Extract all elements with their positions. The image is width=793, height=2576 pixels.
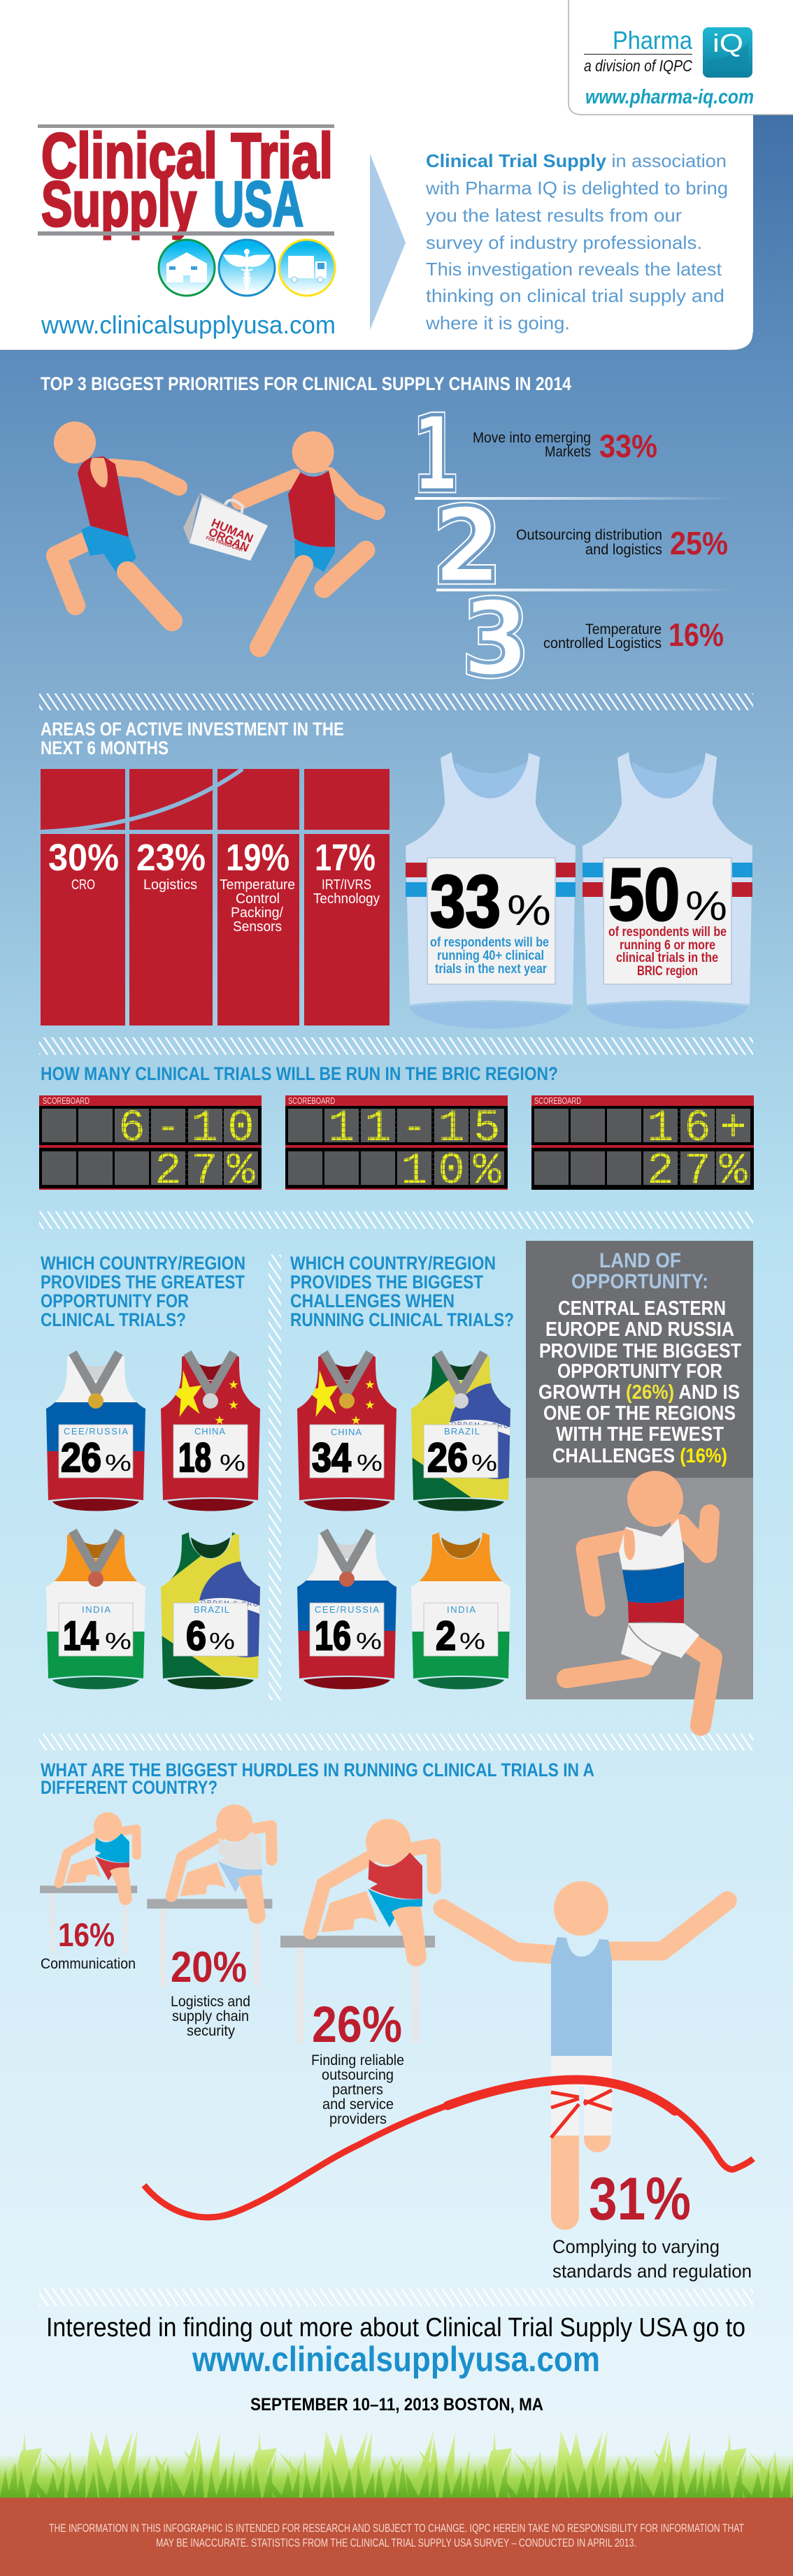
icon: caduceus (219, 240, 275, 296)
bar: IRT/IVRS 17% (313, 837, 380, 907)
heading: areas of investment: AREAS OF ACTIVE INVESTMENT IN THE (41, 719, 344, 740)
singlet: 33%: 33 (430, 861, 501, 943)
heading: biggest challenges: PROVIDES THE BIGGEST (290, 1272, 483, 1293)
singlet: 50%: 50 (608, 854, 680, 936)
scoreboard: 16+ 27%: 2 (647, 1146, 674, 1197)
jersey: China 18%: 18 (178, 1435, 211, 1481)
jersey: China 18% (161, 1351, 260, 1511)
jersey: CEE/Russia 16%: 16 (315, 1613, 351, 1659)
panel text: EUROPE AND RUSSIA (545, 1318, 734, 1341)
panel text: CHALLENGES (16%) (552, 1445, 727, 1467)
scoreboard: 6-10 27%: 0 (227, 1104, 255, 1154)
jersey: China 18%: % (220, 1450, 245, 1476)
illustration: Russia runner (566, 1471, 712, 1725)
jersey: China 34%: 34 (312, 1435, 351, 1481)
jersey: Brazil 6%: % (209, 1628, 235, 1654)
footer (0, 2498, 793, 2576)
stat: regulation: 31% (589, 2166, 691, 2233)
scoreboard: 6-10 27%: 2 (155, 1146, 182, 1197)
panel text: OPPORTUNITY FOR (557, 1360, 722, 1383)
logo: Clinical Trial Supply USA: USA (213, 169, 303, 240)
stat: logistics: security (187, 2023, 235, 2039)
priority 1 text: Markets (545, 444, 591, 460)
call to action (46, 2313, 745, 2415)
priority 3 text: controlled Logistics (543, 635, 662, 652)
scoreboard: 6-10 27%: % (227, 1146, 255, 1197)
singlet: 33% (406, 752, 576, 1029)
scoreboard: 11-15 10% (285, 1095, 508, 1197)
icon: warehouse (159, 240, 215, 296)
caption: running 6 or more (620, 938, 715, 953)
heading: greatest opportunity (41, 1253, 245, 1330)
jersey: CEE/Russia 16% (297, 1528, 396, 1689)
jersey: CEE/Russia 16%: % (356, 1628, 382, 1654)
logo box: Pharma IQ (569, 0, 793, 115)
stat: logistics: 20% (171, 1943, 247, 1992)
scoreboard: 11-15 10%: % (473, 1146, 501, 1197)
stat: communication: 16% (58, 1916, 115, 1953)
jersey: India 2%: INDIA (447, 1604, 476, 1615)
heading: areas of investment: NEXT 6 MONTHS (41, 737, 169, 758)
scoreboard: 16+ 27%: 6 (684, 1104, 711, 1154)
jersey: China 34%: % (357, 1450, 383, 1476)
logo box: Pharma IQ: a division of IQPC (584, 57, 692, 75)
scoreboard: 6-10 27%: 6 (118, 1104, 145, 1154)
logo box: Pharma IQ: iQ (713, 29, 743, 57)
jersey: Brazil 6% (161, 1532, 260, 1689)
intro text: Clinical Trial Supply in association (426, 150, 727, 171)
singlet: 50%: % (685, 883, 727, 929)
jersey: China 18%: CHINA (194, 1426, 225, 1437)
stat: regulation (552, 2166, 752, 2282)
singlet: 33%: % (507, 886, 551, 934)
jersey: Brazil 26% (411, 1351, 510, 1511)
chart: investment track bars (41, 769, 390, 1026)
heading: biggest challenges: CHALLENGES WHEN (290, 1290, 455, 1311)
jersey: CEE/Russia 16%: CEE/RUSSIA (315, 1604, 379, 1615)
intro text: This investigation reveals the latest (426, 259, 722, 280)
panel title: LAND OF (599, 1249, 681, 1272)
stat: outsourcing: providers (329, 2111, 387, 2127)
numeral 3: 3 (462, 579, 529, 699)
priority 3 text (543, 617, 724, 653)
priority 2 text (516, 525, 728, 561)
briefcase: human organ: HUMAN (209, 516, 255, 545)
arrow (370, 154, 406, 330)
scoreboard: 11-15 10%: 1 (364, 1104, 392, 1154)
panel text (538, 1297, 741, 1467)
intro text: thinking on clinical trial supply and (426, 285, 724, 306)
bar: Temperature 19% (220, 837, 295, 935)
stat: communication (41, 1916, 136, 1972)
priority 1 text: 33% (599, 428, 657, 464)
heading: biggest hurdles: WHAT ARE THE BIGGEST HURDLES IN RUNNING CLINICAL TRIALS IN A (41, 1760, 594, 1780)
stat: outsourcing: 26% (312, 1996, 402, 2053)
jersey: India 14%: 14 (63, 1613, 99, 1659)
priority 2 text: Outsourcing distribution (516, 527, 662, 543)
jersey: China 34% (297, 1351, 396, 1511)
jersey: CEE/Russia 26%: 26 (61, 1435, 101, 1481)
briefcase: human organ: FOR TRANSPLANT (205, 535, 244, 553)
jersey: India 2%: 2 (436, 1613, 456, 1659)
scoreboard: 6-10 27%: 7 (191, 1146, 218, 1197)
jersey: Brazil 26%: 26 (427, 1435, 468, 1481)
jersey: Brazil 6%: BRAZIL (194, 1604, 229, 1615)
stat: outsourcing: outsourcing (322, 2067, 394, 2083)
caption (430, 935, 549, 977)
heading: biggest challenges (290, 1253, 514, 1330)
runner 2 (240, 431, 377, 647)
bar: IRT/IVRS 17%: IRT/IVRS (322, 877, 371, 893)
singlet: 50% (583, 752, 752, 1029)
bar: Temperature 19%: Packing/ (231, 905, 283, 921)
jersey: Brazil 26%: ORDEM E PRO (451, 1420, 508, 1430)
caption: clinical trials in the (616, 951, 718, 965)
priority 3 text: Temperature (585, 621, 662, 638)
intro text: survey of industry professionals. (426, 232, 702, 253)
jersey: India 2% (411, 1532, 510, 1689)
priority list (413, 394, 734, 699)
scoreboard: 16+ 27%: + (720, 1104, 747, 1154)
scoreboard: 16+ 27%: SCOREBOARD (534, 1095, 581, 1106)
numeral 1: 1 (413, 394, 459, 515)
scoreboard: 16+ 27%: 1 (647, 1104, 674, 1154)
priority 3 text: 16% (669, 617, 724, 653)
jersey: CEE/Russia 26% (46, 1351, 145, 1511)
jersey: India 14% (46, 1528, 145, 1689)
grass (0, 2429, 793, 2498)
scoreboard: 16+ 27% (531, 1095, 754, 1197)
panel text: GROWTH (26%) AND IS (538, 1381, 740, 1404)
call to action: www.clinicalsupplyusa.com (192, 2340, 600, 2379)
scoreboard: 11-15 10%: 1 (438, 1104, 465, 1154)
stat: regulation: standards and regulation (552, 2261, 752, 2282)
intro text: where it is going. (425, 312, 570, 333)
caption: running 40+ clinical (437, 949, 544, 963)
runner 1 (54, 422, 179, 621)
scoreboard: 6-10 27%: SCOREBOARD (43, 1095, 90, 1106)
priority 1 text: Move into emerging (473, 430, 591, 446)
heading: greatest opportunity: WHICH COUNTRY/REGION (41, 1253, 245, 1274)
briefcase: human organ (183, 493, 268, 561)
scoreboard: 6-10 27%: 1 (191, 1104, 218, 1154)
bar: Logistics 23%: 23% (136, 837, 206, 879)
stat: outsourcing: partners (332, 2082, 383, 2098)
jersey: Brazil 26%: BRAZIL (444, 1426, 480, 1437)
bar: CRO 30%: CRO (71, 877, 95, 893)
bar: Temperature 19%: Control (236, 891, 280, 907)
caption: BRIC region (637, 964, 698, 979)
stat: communication: Communication (41, 1956, 136, 1972)
call to action: SEPTEMBER 10–11, 2013 BOSTON, MA (250, 2395, 543, 2415)
jersey: CEE/Russia 26%: % (105, 1450, 131, 1476)
logo box: Pharma IQ: www.pharma-iq.com (585, 86, 754, 108)
scoreboard: 11-15 10%: 1 (401, 1146, 428, 1197)
heading: greatest opportunity: OPPORTUNITY FOR (41, 1290, 189, 1311)
logo: Clinical Trial Supply USA (38, 121, 334, 240)
intro text (425, 150, 728, 333)
heading: biggest hurdles (41, 1760, 594, 1798)
heading: BRIC trials: HOW MANY CLINICAL TRIALS WILL BE RUN IN THE BRIC REGION? (41, 1063, 558, 1084)
panel text: CENTRAL EASTERN (558, 1297, 726, 1320)
bar: Temperature 19%: Temperature (220, 877, 295, 893)
briefcase: human organ: ORGAN (206, 525, 251, 554)
numeral 2: 2 (433, 486, 501, 606)
scoreboard: 6-10 27% (39, 1095, 262, 1197)
heading: biggest challenges: RUNNING CLINICAL TRIALS? (290, 1309, 514, 1330)
intro text: you the latest results from our (426, 205, 682, 226)
illustration: relay runners with organ case (54, 422, 377, 647)
stat: logistics (171, 1943, 250, 2039)
logo: Clinical Trial Supply USA: Supply (41, 169, 197, 240)
jersey: China 34%: CHINA (331, 1427, 362, 1437)
priority 2 text: 25% (670, 525, 728, 561)
jersey: India 2%: % (459, 1628, 485, 1654)
panel title (571, 1249, 708, 1293)
caption: of respondents will be (608, 925, 727, 940)
panel title: OPPORTUNITY: (571, 1270, 708, 1293)
numeral 2: 2 (433, 486, 501, 606)
website link: www.clinicalsupplyusa.com (41, 310, 336, 339)
heading: areas of investment (41, 719, 344, 758)
stat: regulation: Complying to varying (552, 2236, 720, 2257)
jersey: India 14%: INDIA (82, 1604, 110, 1615)
scoreboard: 11-15 10%: 5 (473, 1104, 501, 1154)
hurdler: 26% (280, 1819, 435, 2043)
bar: CRO 30%: 30% (48, 837, 119, 879)
jersey: Brazil 26%: % (471, 1450, 497, 1476)
scoreboard: 11-15 10%: 0 (438, 1146, 465, 1197)
scoreboard: 16+ 27%: % (719, 1146, 748, 1197)
numeral 1 (413, 394, 459, 515)
panel: land of opportunity (526, 1241, 753, 1699)
scoreboard: 6-10 27%: - (155, 1104, 182, 1154)
bar: Logistics 23%: Logistics (143, 877, 197, 893)
bar: Temperature 19%: 19% (226, 837, 290, 879)
hurdler: 16% (40, 1812, 137, 1953)
scoreboard: 11-15 10%: - (401, 1104, 428, 1154)
stat: outsourcing (311, 1996, 404, 2127)
hurdler: 20% (147, 1804, 272, 1986)
bar: IRT/IVRS 17%: Technology (313, 891, 380, 907)
scoreboard: 16+ 27%: 7 (684, 1146, 711, 1197)
caption: of respondents will be (430, 935, 549, 950)
priority 1 text (473, 428, 657, 464)
heading: top 3 priorities: TOP 3 BIGGEST PRIORITIES FOR CLINICAL SUPPLY CHAINS IN 2014 (41, 373, 571, 394)
priority 2 text: and logistics (585, 542, 662, 558)
scoreboard: 11-15 10%: SCOREBOARD (288, 1095, 335, 1106)
bar: Temperature 19%: Sensors (233, 919, 282, 935)
stat: logistics: supply chain (172, 2008, 249, 2024)
panel text: ONE OF THE REGIONS (543, 1402, 736, 1425)
heading: biggest hurdles: DIFFERENT COUNTRY? (41, 1777, 217, 1798)
heading: greatest opportunity: CLINICAL TRIALS? (41, 1309, 186, 1330)
heading: greatest opportunity: PROVIDES THE GREATEST (41, 1272, 245, 1293)
intro text: with Pharma IQ is delighted to bring (425, 178, 728, 199)
panel text: WITH THE FEWEST (556, 1423, 724, 1446)
logo: Clinical Trial Supply USA: Clinical Trial (41, 121, 333, 192)
panel text: PROVIDE THE BIGGEST (539, 1340, 741, 1362)
logo box: Pharma IQ: Pharma (613, 26, 693, 55)
jersey: Brazil 6%: 6 (186, 1613, 206, 1659)
illustration: winner and finish tape (144, 1881, 753, 2230)
stat: logistics: Logistics and (171, 1994, 250, 2010)
heading: biggest challenges: WHICH COUNTRY/REGION (290, 1253, 496, 1274)
caption (608, 925, 727, 979)
stat: outsourcing: Finding reliable (311, 2052, 404, 2068)
jersey: India 14%: % (105, 1628, 131, 1654)
numeral 1: 1 (413, 394, 459, 515)
scoreboard: 11-15 10%: 1 (328, 1104, 355, 1154)
stat: outsourcing: and service (322, 2096, 394, 2113)
icon: truck (279, 240, 335, 296)
header panel (0, 0, 793, 350)
jersey: Brazil 6%: ORDEM E PRO (201, 1599, 258, 1608)
caption: trials in the next year (435, 962, 548, 977)
jersey: CEE/Russia 26%: CEE/RUSSIA (64, 1426, 128, 1437)
bar: IRT/IVRS 17%: 17% (315, 837, 376, 879)
numeral 3: 3 (462, 579, 529, 699)
